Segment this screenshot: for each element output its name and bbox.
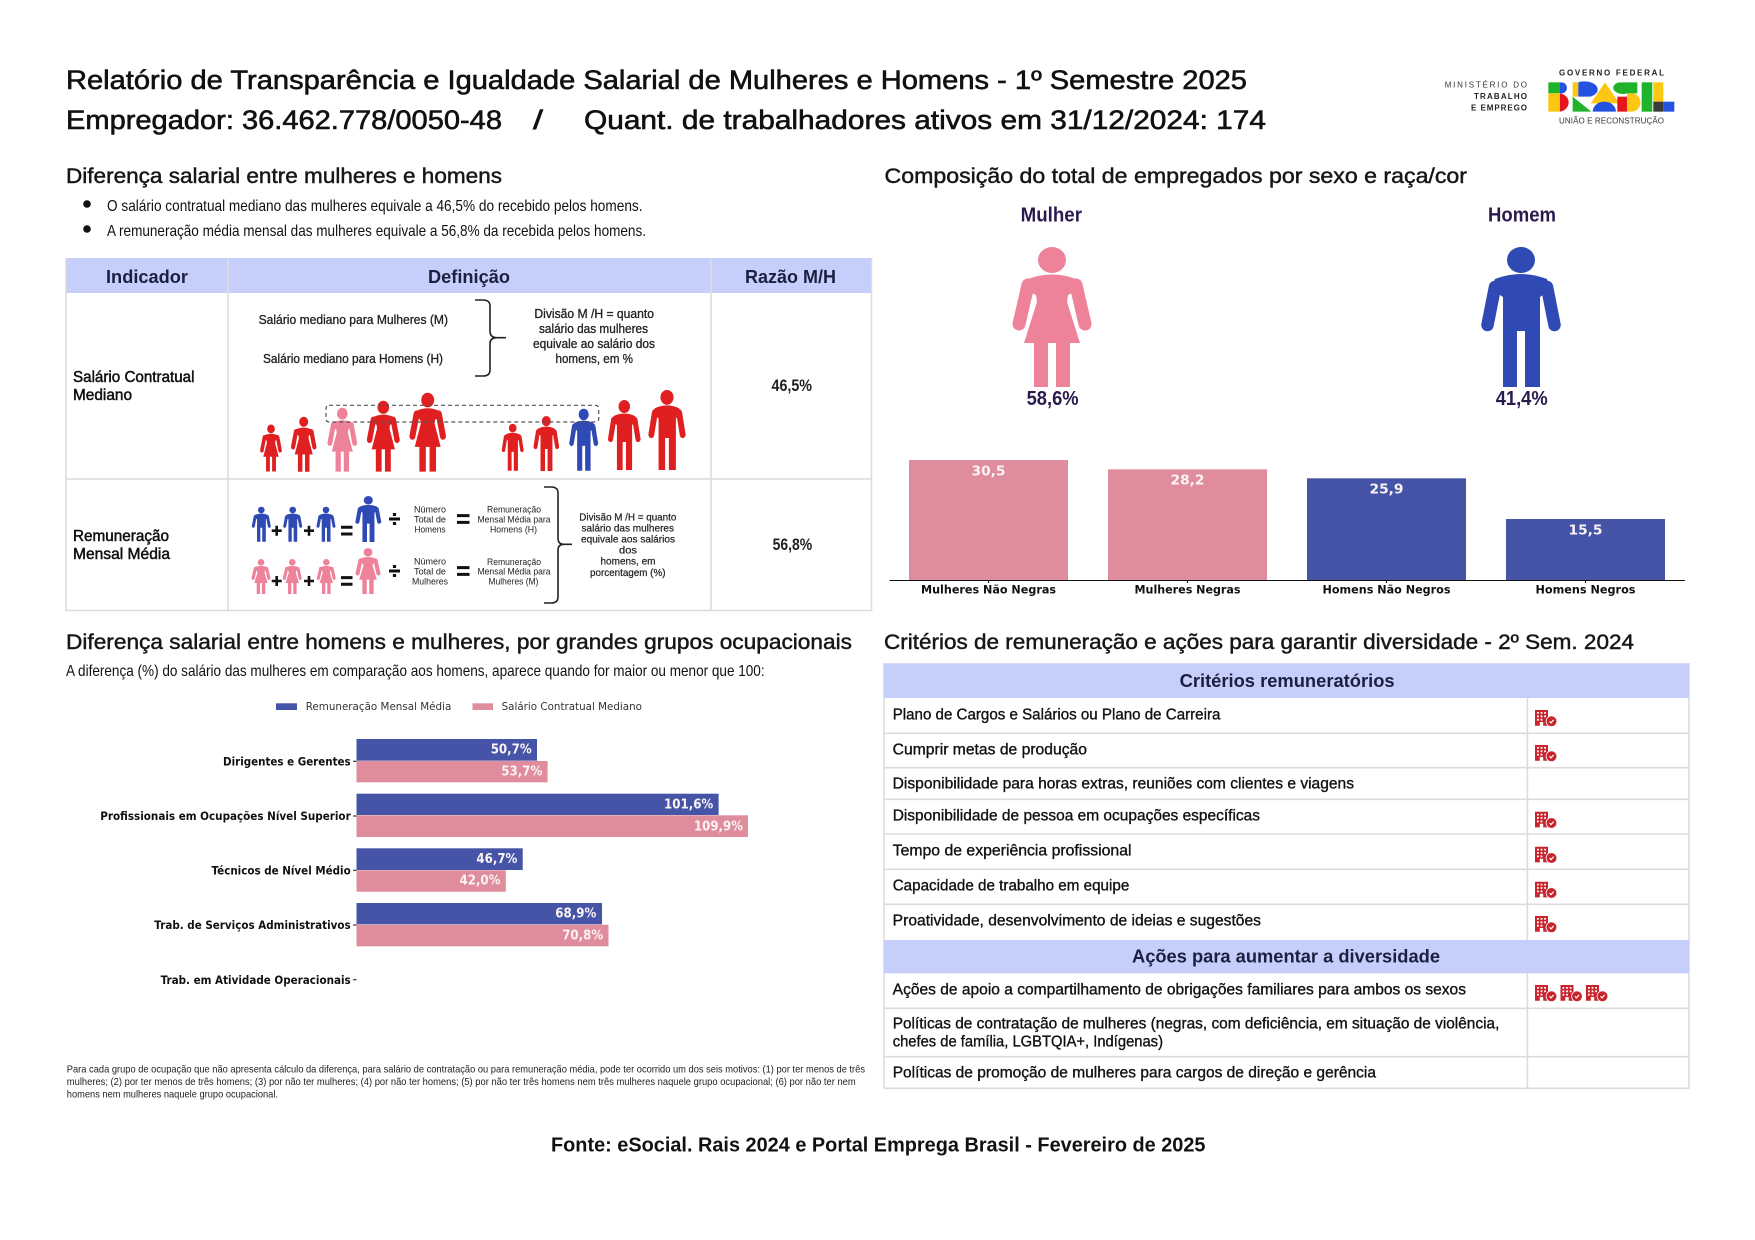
footnote: Para cada grupo de ocupação que não apresenta cálculo da diferença, para salário de contratação ou para remuneração média, pode ter ocorrido um dos seis motivos: (1) por ter menos de três (67, 1064, 865, 1076)
criteria rows: Disponibilidade para horas extras, reuniões com clientes e viagens (893, 775, 1354, 792)
value: 46,5%: 46,5% (772, 376, 812, 395)
title: Empregador: 36.462.778/0050-48 (66, 105, 502, 135)
definition: remuneração média: Remuneração (487, 504, 541, 516)
definition: remuneração média: Número (414, 504, 446, 516)
criteria rows: Proatividade, desenvolvimento de ideias e sugestões (893, 912, 1261, 929)
action rows: Políticas de contratação de mulheres (negras, com deficiência, em situação de violência, (893, 1016, 1499, 1033)
bar chart: composição por sexo e raça/cor: 28,2 (1170, 472, 1204, 488)
definition: salário mediano: Salário mediano para Mulheres (M) (259, 313, 448, 327)
subtext: A diferença (%) do salário das mulheres em comparação aos homens, aparece quando for maior ou menor que 100: (66, 663, 765, 680)
definition: salário mediano: Divisão M /H = quanto (534, 307, 654, 321)
panel: tabela de critérios e ações (884, 663, 1689, 1088)
definition: salário mediano: homens, em % (556, 352, 633, 366)
definition: remuneração média: Homens (H) (490, 524, 537, 536)
footnote: mulheres; (2) por ter menos de três homens; (3) por não ter mulheres; (4) por não ter homens; (5) por não ter três homens nem três mulheres naquele grupo ocupacional; (6) por não ter nem (67, 1076, 856, 1088)
logo: ministério e governo federal: UNIÃO E RECONSTRUÇÃO (1559, 116, 1664, 125)
title: Quant. de trabalhadores ativos em 31/12/2024: 174 (584, 105, 1266, 135)
bar chart: grupos ocupacionais (100, 739, 748, 987)
bar chart: grupos ocupacionais: 42,0% (460, 873, 501, 889)
logo: ministério e governo federal (1445, 69, 1674, 125)
definition: remuneração média: Número (414, 556, 446, 568)
bar chart: grupos ocupacionais: 50,7% (491, 741, 532, 757)
definition: remuneração média: Mulheres (M) (488, 576, 538, 588)
bar chart: grupos ocupacionais: Dirigentes e Gerentes (223, 754, 351, 768)
table header: Razão M/H (745, 267, 836, 287)
bar chart: grupos ocupacionais: 109,9% (694, 818, 743, 834)
definition: remuneração média: Divisão M /H = quanto (579, 511, 676, 523)
figure: homem (1488, 205, 1556, 410)
table header: Definição (428, 267, 510, 287)
bar chart: composição por sexo e raça/cor: Mulheres Negras (1134, 582, 1241, 596)
bullet list: A remuneração média mensal das mulheres equivale a 56,8% da recebida pelos homens. (107, 223, 646, 240)
definition: remuneração média: Remuneração (487, 557, 541, 568)
section header: critérios remuneratórios: Critérios remuneratórios (1180, 671, 1395, 691)
criteria rows: Tempo de experiência profissional (893, 842, 1132, 859)
definition: remuneração média: Total de (414, 566, 446, 578)
bar chart: grupos ocupacionais: 46,7% (476, 851, 518, 867)
figure: mulher (1019, 205, 1085, 410)
bar chart: composição por sexo e raça/cor: Homens Não Negros (1322, 582, 1451, 596)
bullet list: O salário contratual mediano das mulheres equivale a 46,5% do recebido pelos homens. (107, 198, 642, 215)
figure: mulher: 58,6% (1027, 388, 1079, 410)
row label: remuneração mensal média: Remuneração (73, 528, 169, 545)
criteria rows: Cumprir metas de produção (893, 741, 1087, 758)
definition: remuneração média: Mensal Média para (478, 566, 551, 578)
row label: salário contratual mediano: Mediano (73, 387, 132, 404)
criteria rows: Plano de Cargos e Salários ou Plano de Carreira (893, 706, 1221, 723)
logo: ministério e governo federal: TRABALHO (1474, 92, 1527, 101)
bar chart: composição por sexo e raça/cor: Homens Negros (1536, 582, 1636, 596)
heading: critérios: Critérios de remuneração e ações para garantir diversidade - 2º Sem. 2024 (884, 631, 1634, 654)
definition: salário mediano (259, 300, 655, 376)
definition: salário mediano: salário das mulheres (539, 322, 648, 336)
bar chart: composição por sexo e raça/cor: 30,5 (972, 463, 1006, 479)
company icons: ações (1535, 985, 1608, 1002)
title (66, 65, 1266, 135)
bar chart: grupos ocupacionais: Trab. em Atividade Operacionais (161, 973, 351, 987)
section header: ações: Ações para aumentar a diversidade (1132, 946, 1440, 966)
definition: remuneração média (253, 487, 676, 603)
table header (66, 258, 872, 293)
footnote (67, 1064, 865, 1100)
definition: remuneração média: salário das mulheres (582, 522, 674, 534)
bar chart: grupos ocupacionais: 53,7% (501, 763, 543, 779)
figure: mulher: Mulher (1021, 205, 1082, 227)
section header: critérios remuneratórios (884, 663, 1689, 698)
title: / (533, 105, 544, 135)
bar chart: composição por sexo e raça/cor: Mulheres Não Negras (921, 582, 1056, 596)
footnote: homens nem mulheres naquele grupo ocupacional. (67, 1088, 278, 1100)
bar chart: grupos ocupacionais: 101,6% (664, 796, 714, 812)
bar chart: composição por sexo e raça/cor: 15,5 (1568, 522, 1602, 538)
definition: salário mediano: equivale ao salário dos (533, 337, 655, 351)
bar chart: grupos ocupacionais: 68,9% (555, 905, 597, 921)
legend (276, 701, 642, 713)
company icons: critérios (1535, 710, 1557, 933)
action rows: Políticas de promoção de mulheres para cargos de direção e gerência (893, 1064, 1376, 1081)
heading: composição: Composição do total de empregados por sexo e raça/cor (884, 165, 1467, 188)
definition: remuneração média: dos (619, 545, 637, 557)
definition: remuneração média: porcentagem (%) (590, 567, 666, 579)
logo: ministério e governo federal: GOVERNO FEDERAL (1559, 69, 1664, 78)
section header: ações (884, 940, 1689, 973)
bar chart: grupos ocupacionais: Técnicos de Nível Médio (212, 864, 351, 878)
definition: remuneração média: equivale aos salários (581, 534, 675, 546)
definition: remuneração média: Mensal Média para (478, 514, 551, 526)
panel: tabela de indicadores (66, 258, 872, 611)
row label: salário contratual mediano (73, 369, 194, 404)
bar chart: composição por sexo e raça/cor: 25,9 (1370, 481, 1404, 497)
criteria rows (893, 706, 1354, 929)
row label: remuneração mensal média (73, 528, 170, 563)
table header: Indicador (106, 267, 188, 287)
definition: remuneração média: Homens (414, 524, 446, 536)
bar chart: grupos ocupacionais: Trab. de Serviços Administrativos (154, 918, 351, 932)
definition: remuneração média: homens, em (600, 556, 656, 568)
legend: Remuneração Mensal Média (306, 701, 451, 713)
logo: ministério e governo federal: MINISTÉRIO DO (1445, 80, 1527, 89)
bullet list (83, 198, 646, 240)
definition: salário mediano: Salário mediano para Homens (H) (263, 352, 443, 366)
action rows (893, 981, 1499, 1081)
icon row: mediana de salários (262, 390, 683, 472)
value: 56,8%: 56,8% (773, 535, 812, 554)
bar chart: grupos ocupacionais: Profissionais em Ocupações Nível Superior (100, 809, 351, 823)
criteria rows: Disponibilidade de pessoa em ocupações específicas (893, 807, 1260, 824)
heading: diferença salarial: Diferença salarial entre mulheres e homens (66, 165, 502, 188)
figure: homem: Homem (1488, 205, 1556, 227)
action rows: Ações de apoio a compartilhamento de obrigações familiares para ambos os sexos (893, 981, 1466, 998)
bar chart: composição por sexo e raça/cor (890, 460, 1685, 596)
action rows: chefes de família, LGBTQIA+, Indígenas) (893, 1034, 1163, 1051)
definition: remuneração média: Total de (414, 514, 446, 526)
heading: grupos ocupacionais: Diferença salarial entre homens e mulheres, por grandes grupos ocupacionais (66, 631, 852, 654)
bar chart: grupos ocupacionais: 70,8% (562, 927, 604, 943)
figure: homem: 41,4% (1496, 388, 1548, 410)
criteria rows: Capacidade de trabalho em equipe (893, 877, 1129, 894)
title: Relatório de Transparência e Igualdade Salarial de Mulheres e Homens - 1º Semestre 2025 (66, 65, 1247, 95)
logo: ministério e governo federal: E EMPREGO (1471, 104, 1527, 113)
row label: remuneração mensal média: Mensal Média (73, 546, 170, 563)
definition: remuneração média: Mulheres (412, 576, 448, 588)
row label: salário contratual mediano: Salário Contratual (73, 369, 194, 386)
source line: Fonte: eSocial. Rais 2024 e Portal Emprega Brasil - Fevereiro de 2025 (551, 1134, 1206, 1157)
legend: Salário Contratual Mediano (502, 701, 642, 713)
